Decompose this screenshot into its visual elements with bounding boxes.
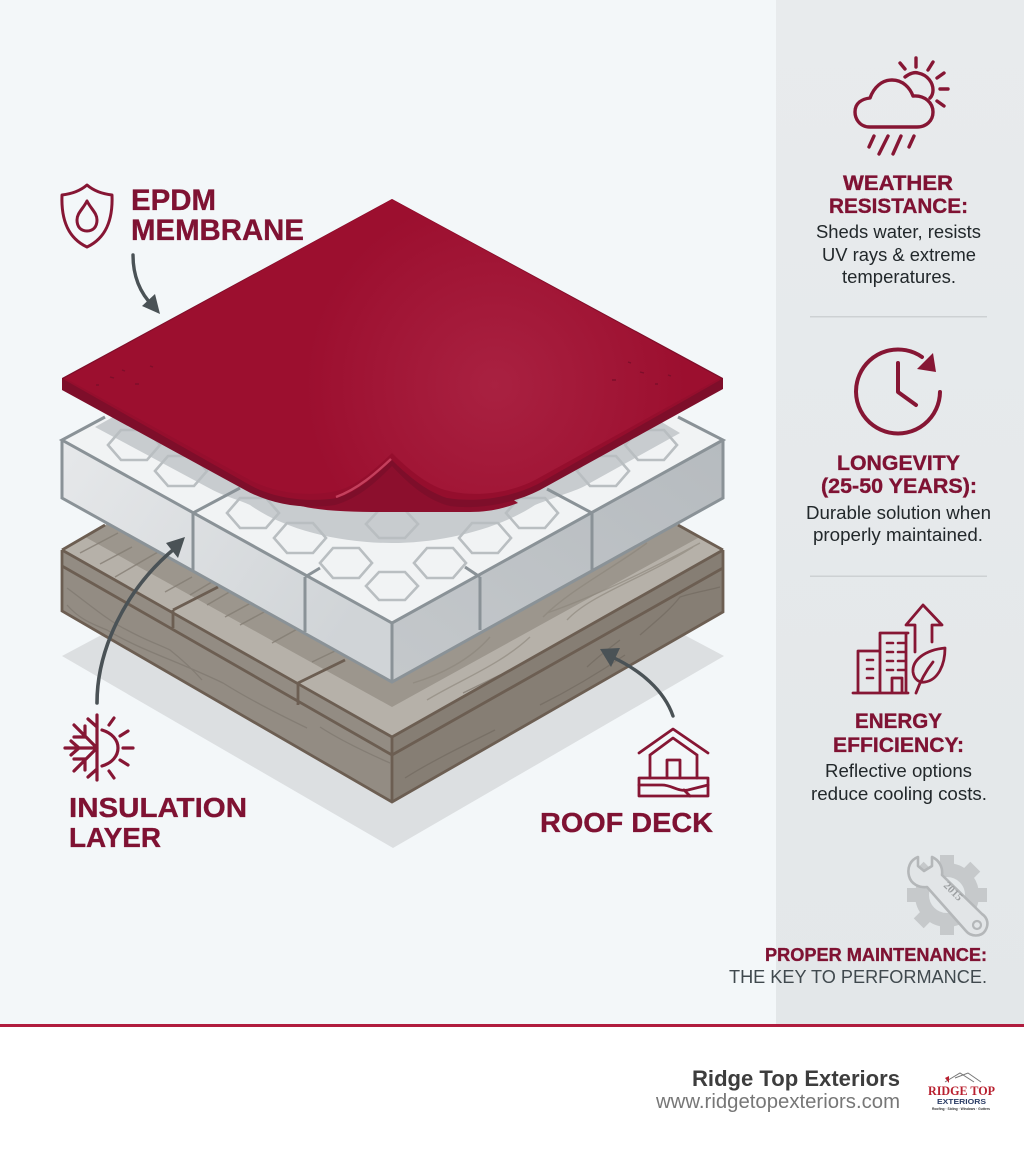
heading: proper maintenance: PROPER MAINTENANCE:	[765, 945, 987, 965]
icon: buildings, arrow and leaf	[853, 605, 945, 693]
description: THE KEY TO PERFORMANCE.	[729, 967, 987, 987]
website: www.ridgetopexteriors.com	[655, 1091, 900, 1113]
footer band	[0, 1024, 1024, 1154]
surface speckles	[96, 362, 671, 385]
icon: snowflake and sun	[65, 715, 133, 780]
heading: longevity: (25-50 YEARS):	[821, 475, 977, 498]
maintenance callout	[729, 855, 987, 987]
description: reduce cooling costs.	[811, 784, 987, 804]
icon: shield with water drop	[62, 185, 112, 247]
label: insulation layer	[65, 715, 247, 853]
heading: EPDM MEMBRANE: EPDM	[131, 184, 216, 217]
heading: weather resistance: WEATHER	[843, 172, 953, 195]
layer: roof deck	[60, 524, 724, 804]
icon: cloud, sun and rain	[855, 58, 948, 154]
side panel background	[776, 0, 1024, 1024]
curled underside	[282, 440, 518, 512]
arrow: to insulation	[97, 537, 185, 703]
company logo: RIDGE TOP	[928, 1083, 995, 1098]
shadow cast by membrane	[95, 418, 680, 543]
description: temperatures.	[842, 267, 956, 287]
heading: energy efficiency: EFFICIENCY:	[833, 734, 964, 757]
hexagon pattern	[108, 430, 677, 600]
icon: gear and wrench	[907, 855, 987, 936]
membrane edge	[62, 199, 723, 507]
benefit: weather resistance	[816, 58, 981, 287]
icon: house on deck	[639, 729, 708, 796]
arrow: to roof deck	[600, 648, 673, 716]
curl highlight	[336, 459, 391, 497]
company logo: Roofing · Siding · Windows · Gutters	[932, 1107, 990, 1111]
description: UV rays & extreme	[822, 245, 976, 265]
membrane mid band	[63, 199, 722, 500]
heading: INSULATION LAYER: LAYER	[69, 822, 161, 853]
label: EPDM membrane	[62, 184, 304, 247]
heading: weather resistance: RESISTANCE:	[829, 195, 968, 218]
arrow: to membrane	[133, 255, 160, 314]
description: properly maintained.	[813, 525, 983, 545]
heading: EPDM MEMBRANE: MEMBRANE	[131, 214, 304, 247]
heading: INSULATION LAYER: INSULATION	[69, 792, 247, 823]
company name: Ridge Top Exteriors	[692, 1066, 900, 1091]
label: roof deck	[540, 729, 713, 838]
layer: EPDM membrane	[62, 199, 723, 512]
membrane top face	[65, 200, 720, 494]
deck shadow band	[86, 524, 698, 707]
description: Durable solution when	[806, 503, 991, 523]
description: Reflective options	[825, 761, 972, 781]
icon: gear and wrench: 2015	[941, 880, 965, 904]
heading: energy efficiency: ENERGY	[855, 710, 942, 733]
layer: insulation boards	[59, 416, 726, 684]
heading: ROOF DECK: ROOF DECK	[540, 807, 713, 838]
company logo	[928, 1073, 995, 1111]
ground shadow	[62, 480, 724, 848]
company logo: EXTERIORS	[937, 1097, 986, 1106]
deck outlines	[62, 525, 723, 802]
insulation outlines	[62, 417, 723, 682]
description: Sheds water, resists	[816, 222, 981, 242]
icon: clock with arrow	[856, 349, 940, 433]
heading: longevity: LONGEVITY	[837, 452, 960, 475]
benefit: longevity	[806, 349, 991, 545]
benefit: energy efficiency	[811, 605, 987, 804]
